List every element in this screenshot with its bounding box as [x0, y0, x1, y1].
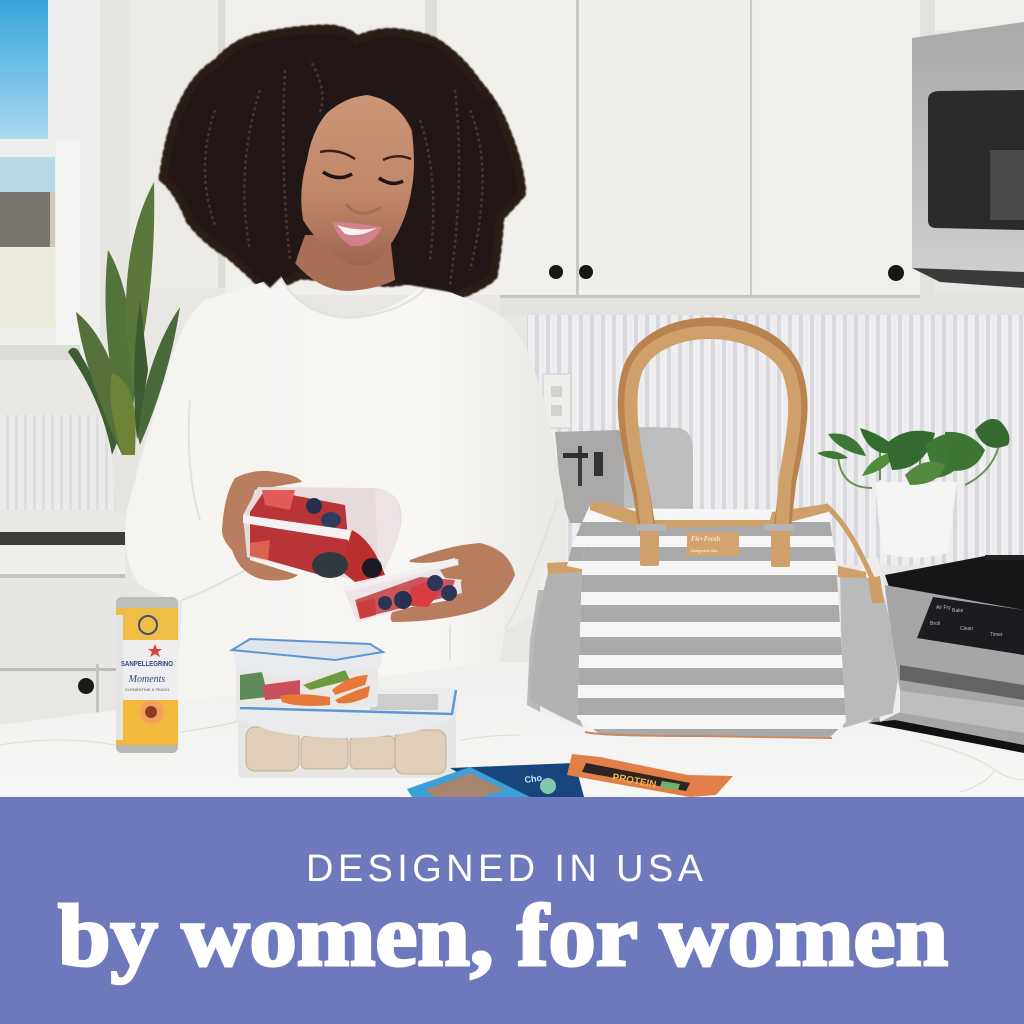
toaster	[555, 427, 693, 523]
right side pocket	[838, 557, 900, 728]
protein bar: PROTEIN	[611, 772, 657, 791]
upper food container with vegetables	[232, 638, 383, 707]
handles	[626, 326, 799, 545]
stove: Broil	[930, 621, 940, 627]
snake plant	[68, 182, 180, 515]
sparkling drink can: CLEMENTINE & PEACH	[125, 687, 169, 692]
sweater	[125, 276, 566, 702]
sparkling drink can	[116, 597, 178, 753]
blue snack pouch: Cho	[524, 773, 543, 785]
right thumb	[440, 563, 492, 585]
left wall and counter	[0, 415, 130, 731]
neck	[295, 235, 395, 291]
potted plant	[817, 419, 1009, 558]
tan top trim	[590, 502, 828, 528]
sparkling drink can: Moments	[128, 674, 165, 685]
lower food container with wraps	[236, 688, 458, 778]
snack wrappers	[407, 754, 733, 797]
marble counter	[0, 662, 1024, 797]
hair back	[163, 29, 522, 297]
side strap	[825, 505, 884, 603]
woman	[125, 29, 566, 702]
stove	[867, 555, 1024, 755]
tilted container of berries	[243, 487, 401, 585]
right hand	[391, 543, 515, 622]
headline: by women, for women	[58, 888, 948, 985]
protein bar	[567, 754, 733, 797]
left side pocket	[526, 560, 586, 728]
sweater folds	[182, 276, 558, 660]
face	[301, 95, 414, 266]
sparkling drink can: SANPELLEGRINO	[121, 661, 173, 668]
hair front, framing the face	[205, 62, 495, 292]
stove: Timer	[990, 632, 1003, 638]
stove: Clean	[960, 626, 973, 632]
stove: Bake	[952, 608, 964, 614]
microwave	[912, 22, 1024, 288]
bottom banner	[0, 797, 1024, 1024]
brand label: Fit+Fresh	[690, 535, 720, 543]
curl strands	[205, 60, 482, 285]
striped main panel	[570, 508, 860, 738]
left top flank	[567, 505, 590, 570]
window	[0, 0, 130, 415]
subtitle: DESIGNED IN USA	[306, 848, 704, 890]
kitchen background	[0, 0, 1024, 800]
blue snack pouch	[407, 763, 584, 797]
lunch bag	[526, 326, 900, 738]
backsplash	[527, 315, 1024, 565]
stove: Air Fry	[936, 605, 951, 611]
brand label	[687, 532, 739, 556]
open tray of berries	[343, 559, 462, 622]
upper cabinets	[130, 0, 1024, 315]
left hand	[222, 471, 302, 580]
brand label: Designed in USA	[691, 549, 718, 553]
strap tabs and buckles	[636, 524, 795, 567]
wall outlet	[543, 374, 571, 428]
brows, eyes, nose and smile	[320, 151, 411, 246]
